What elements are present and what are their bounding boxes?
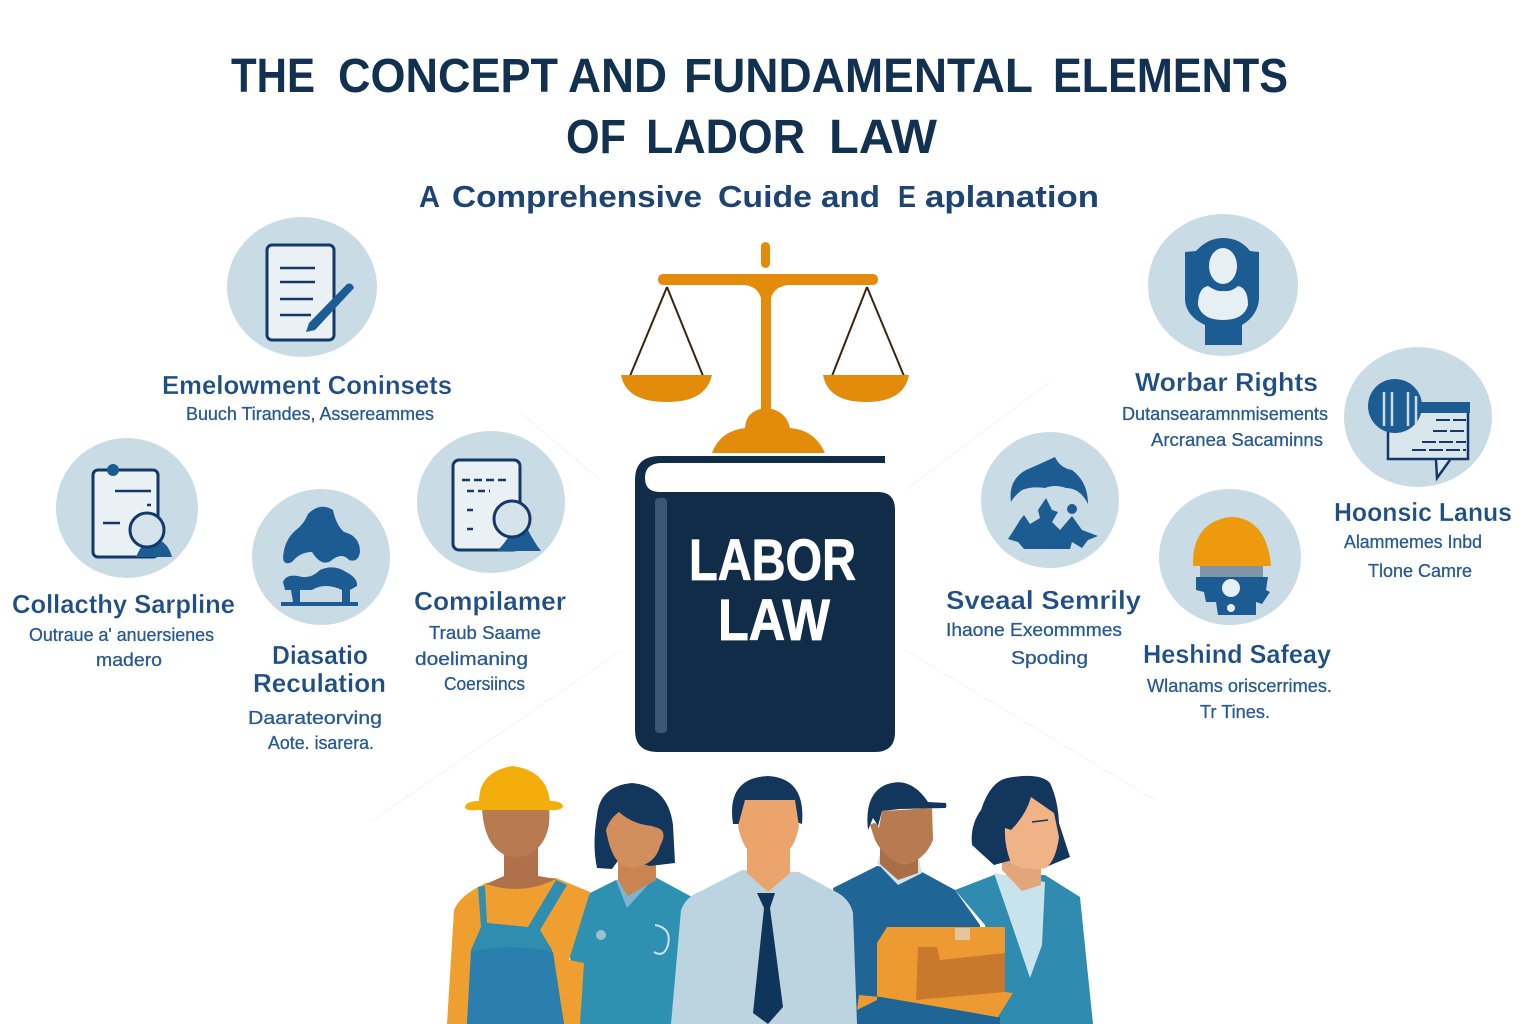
subtitle — [419, 179, 1099, 214]
person: construction worker — [447, 766, 590, 1024]
panel: social security: Spoding — [1011, 648, 1088, 668]
panel: compliance: Compilamer — [414, 586, 566, 616]
icon: scales of justice — [621, 242, 909, 453]
panel: worker rights: Worbar Rights — [1135, 367, 1318, 397]
title: THE — [231, 50, 315, 103]
person: woman in teal scrubs — [567, 783, 692, 1024]
panel: collective bargaining — [12, 438, 235, 670]
panel: health and safety: Wlanams oriscerrimes. — [1147, 676, 1332, 696]
title: OF — [566, 111, 626, 164]
title: LAW — [829, 111, 938, 164]
title — [231, 50, 1288, 164]
icon: regulation shapes — [281, 507, 360, 606]
icon: clipboard and magnifier — [93, 464, 172, 557]
icon: document and magnifier — [453, 460, 541, 551]
title: ELEMENTS — [1053, 50, 1288, 103]
title: FUNDAMENTAL — [684, 50, 1033, 103]
subtitle: and — [821, 179, 880, 214]
book label — [689, 528, 856, 653]
person: woman in blazer — [955, 776, 1093, 1024]
panel: worker rights: Arcranea Sacaminns — [1151, 430, 1323, 450]
illustration: group of workers — [447, 766, 1093, 1024]
title: LADOR — [646, 111, 805, 164]
icon: person shield — [1185, 238, 1259, 345]
book label: LABOR — [689, 528, 856, 593]
panel: dismissal regulation: Aote. isarera. — [268, 733, 374, 753]
panel: health and safety: Heshind Safeay — [1143, 639, 1332, 669]
icon: globe key and document — [1368, 379, 1470, 478]
panel: dismissal regulation — [248, 489, 390, 753]
panel: honest labor: Alammemes Inbd — [1344, 532, 1482, 552]
panel: dismissal regulation: Diasatio — [272, 640, 368, 670]
icon: hard hat and gear — [1193, 517, 1271, 615]
panel: health and safety — [1143, 489, 1332, 722]
panel: compliance: Traub Saame — [429, 623, 541, 643]
title: AND — [568, 50, 667, 103]
panel: worker rights — [1122, 214, 1328, 450]
panel: employment contracts — [162, 217, 452, 424]
panel: social security: Ihaone Exeommmes — [946, 620, 1122, 640]
title: CONCEPT — [338, 50, 558, 103]
subtitle: Comprehensive — [452, 179, 702, 214]
panel: employment contracts: Buuch Tirandes, Assereammes — [186, 404, 434, 424]
panel: collective bargaining: madero — [96, 650, 162, 670]
panel: collective bargaining: Outraue a' anuersienes — [29, 625, 214, 645]
carried box — [857, 927, 1013, 1024]
panel: compliance: Coersiincs — [444, 674, 525, 694]
panel: collective bargaining: Collacthy Sarpline — [12, 589, 235, 619]
panel: worker rights: Dutansearamnmisements — [1122, 404, 1328, 424]
icon: social security shapes — [1008, 457, 1098, 549]
book label: LAW — [718, 588, 830, 653]
panel: compliance: doelimaning — [415, 649, 528, 669]
icon: labor law book — [635, 456, 895, 752]
panel: dismissal regulation: Daarateorving — [248, 708, 382, 728]
subtitle: aplanation — [925, 179, 1099, 214]
panel: honest labor — [1334, 347, 1512, 581]
panel: honest labor: Hoonsic Lanus — [1334, 497, 1512, 527]
person: man in navy with cap — [833, 782, 980, 1024]
panel: social security — [946, 432, 1142, 668]
icon: contract and pen — [267, 245, 354, 340]
panel: social security: Sveaal Semrily — [946, 585, 1142, 615]
panel: dismissal regulation: Reculation — [253, 668, 386, 698]
subtitle: E — [898, 179, 916, 214]
panel: honest labor: Tlone Camre — [1368, 561, 1472, 581]
subtitle: Cuide — [718, 179, 812, 214]
panel: health and safety: Tr Tines. — [1200, 702, 1270, 722]
subtitle: A — [419, 179, 440, 214]
person: man in shirt and tie — [671, 776, 857, 1024]
panel: compliance — [414, 431, 566, 694]
panel: employment contracts: Emelowment Coninsets — [162, 370, 452, 400]
